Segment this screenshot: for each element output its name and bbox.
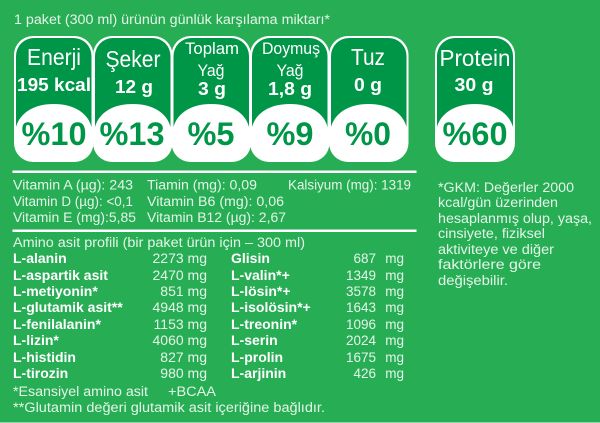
vitamins and minerals table: Kalsiyum (mg): 1319 (288, 178, 411, 192)
GKM note: kcal/gün üzerinden (438, 195, 558, 210)
badge: Toplam Yağ: Toplam (185, 39, 239, 58)
amino acid profile table: mg (385, 350, 404, 365)
vitamins and minerals table: Vitamin D (µg): <0,1 (13, 194, 133, 209)
amino acid profile table: mg (385, 366, 404, 381)
badge: Toplam Yağ (172, 36, 251, 162)
amino acid profile table: 851 mg (160, 283, 207, 299)
badge: Doymuş Yağ: Doymuş (262, 39, 320, 58)
vitamins and minerals table: Tiamin (mg): 0,09 (147, 178, 257, 192)
badge: Enerji: %10 (22, 116, 86, 152)
badge: Şeker (93, 36, 172, 162)
badge: Protein (435, 36, 515, 162)
badge: Tuz: 0 g (354, 75, 382, 95)
amino acid profile table: L-metiyonin* (13, 283, 98, 299)
amino acid profile table: mg (385, 317, 404, 332)
amino acid profile table: 1096 (346, 317, 376, 332)
badge: Enerji (14, 36, 94, 162)
footnotes: *Esansiyel amino asit (13, 384, 148, 399)
amino acid profile table: mg (385, 300, 404, 315)
amino acid profile table: 4060 mg (153, 332, 207, 348)
badge: Tuz: Tuz (351, 44, 385, 70)
amino acid profile table: mg (385, 251, 404, 266)
badge: Enerji: Enerji (27, 44, 81, 70)
vitamins and minerals table: Vitamin B6 (mg): 0,06 (147, 194, 284, 209)
badge: Toplam Yağ: Yağ (198, 61, 224, 80)
footnotes: **Glutamin değeri glutamik asit içeriğine bağlıdır. (13, 400, 325, 415)
amino acid profile table: 980 mg (160, 365, 207, 381)
amino acid profile table: L-lösin*+ (231, 283, 291, 299)
amino acid profile table: L-histidin (13, 349, 76, 365)
amino acid profile table: Amino asit profili (bir paket ürün için – 300 ml) (13, 235, 305, 250)
amino acid profile table: L-serin (231, 332, 278, 348)
amino acid profile table: 1675 (346, 350, 376, 365)
vitamins and minerals table: Vitamin A (µg): 243 (13, 178, 133, 192)
badge: Protein: %60 (442, 116, 508, 152)
amino acid profile table: 1153 mg (154, 316, 207, 332)
amino acid profile table: 2273 mg (153, 250, 207, 266)
amino acid profile table: L-glutamik asit** (13, 299, 123, 315)
badge: Protein: Protein (440, 45, 510, 71)
badge: Tuz: %0 (345, 116, 391, 152)
footnotes (13, 384, 325, 415)
amino acid profile table: L-fenilalanin* (13, 316, 101, 332)
GKM note: faktörlere göre (438, 257, 541, 272)
amino acid profile table: L-alanin (13, 250, 67, 266)
badge: Şeker: %13 (100, 116, 164, 152)
badge: Toplam Yağ: 3 g (198, 79, 226, 99)
amino acid profile table: Glisin (231, 250, 270, 266)
amino acid profile table: L-prolin (231, 349, 283, 365)
amino acid profile table: 2470 mg (153, 267, 207, 283)
amino acid profile table (13, 235, 404, 381)
badge: Tuz (329, 36, 408, 162)
amino acid profile table: L-treonin* (231, 316, 298, 332)
GKM note: *GKM: Değerler 2000 (438, 180, 574, 195)
badge: Şeker: Şeker (106, 46, 161, 72)
amino acid profile table: 3578 (346, 284, 376, 299)
badge: Enerji: 195 kcal (17, 75, 91, 95)
amino acid profile table: L-tirozin (13, 365, 68, 381)
amino acid profile table: 426 (353, 366, 376, 381)
amino acid profile table: L-isolösin*+ (231, 299, 311, 315)
amino acid profile table: 687 (353, 251, 376, 266)
heading: daily intake: 1 paket (300 ml) ürünün günlük karşılama miktarı* (14, 12, 331, 27)
GKM note: hesaplanmış olup, yaşa, (438, 211, 592, 226)
badge: Doymuş Yağ (250, 36, 330, 162)
amino acid profile table: L-valin*+ (231, 267, 290, 283)
vitamins and minerals table (13, 178, 411, 225)
footnotes: +BCAA (168, 384, 216, 399)
amino acid profile table: mg (385, 333, 404, 348)
GKM note: aktiviteye ve diğer (438, 242, 555, 257)
amino acid profile table: L-arjinin (231, 365, 286, 381)
amino acid profile table: mg (385, 268, 404, 283)
GKM note: cinsiyete, fiziksel (438, 226, 545, 241)
amino acid profile table: L-aspartik asit (13, 267, 108, 283)
amino acid profile table: 2024 (346, 333, 376, 348)
badge: Doymuş Yağ: Yağ (276, 61, 304, 80)
badge: Protein: 30 g (454, 75, 494, 95)
badge: Şeker: 12 g (115, 77, 153, 97)
vitamins and minerals table: Vitamin E (mg):5,85 (13, 210, 136, 225)
GKM note (438, 180, 592, 288)
amino acid profile table: 827 mg (160, 349, 207, 365)
amino acid profile table: L-lizin* (13, 332, 59, 348)
amino acid profile table: mg (385, 284, 404, 299)
amino acid profile table: 1349 (346, 268, 376, 283)
amino acid profile table: 1643 (346, 300, 376, 315)
amino acid profile table: 4948 mg (153, 299, 207, 315)
badge: Doymuş Yağ: %9 (266, 116, 314, 152)
badge: Toplam Yağ: %5 (188, 116, 234, 152)
GKM note: değişebilir. (438, 273, 508, 288)
vitamins and minerals table: Vitamin B12 (µg): 2,67 (147, 210, 286, 225)
badge: Doymuş Yağ: 1,8 g (268, 79, 312, 99)
